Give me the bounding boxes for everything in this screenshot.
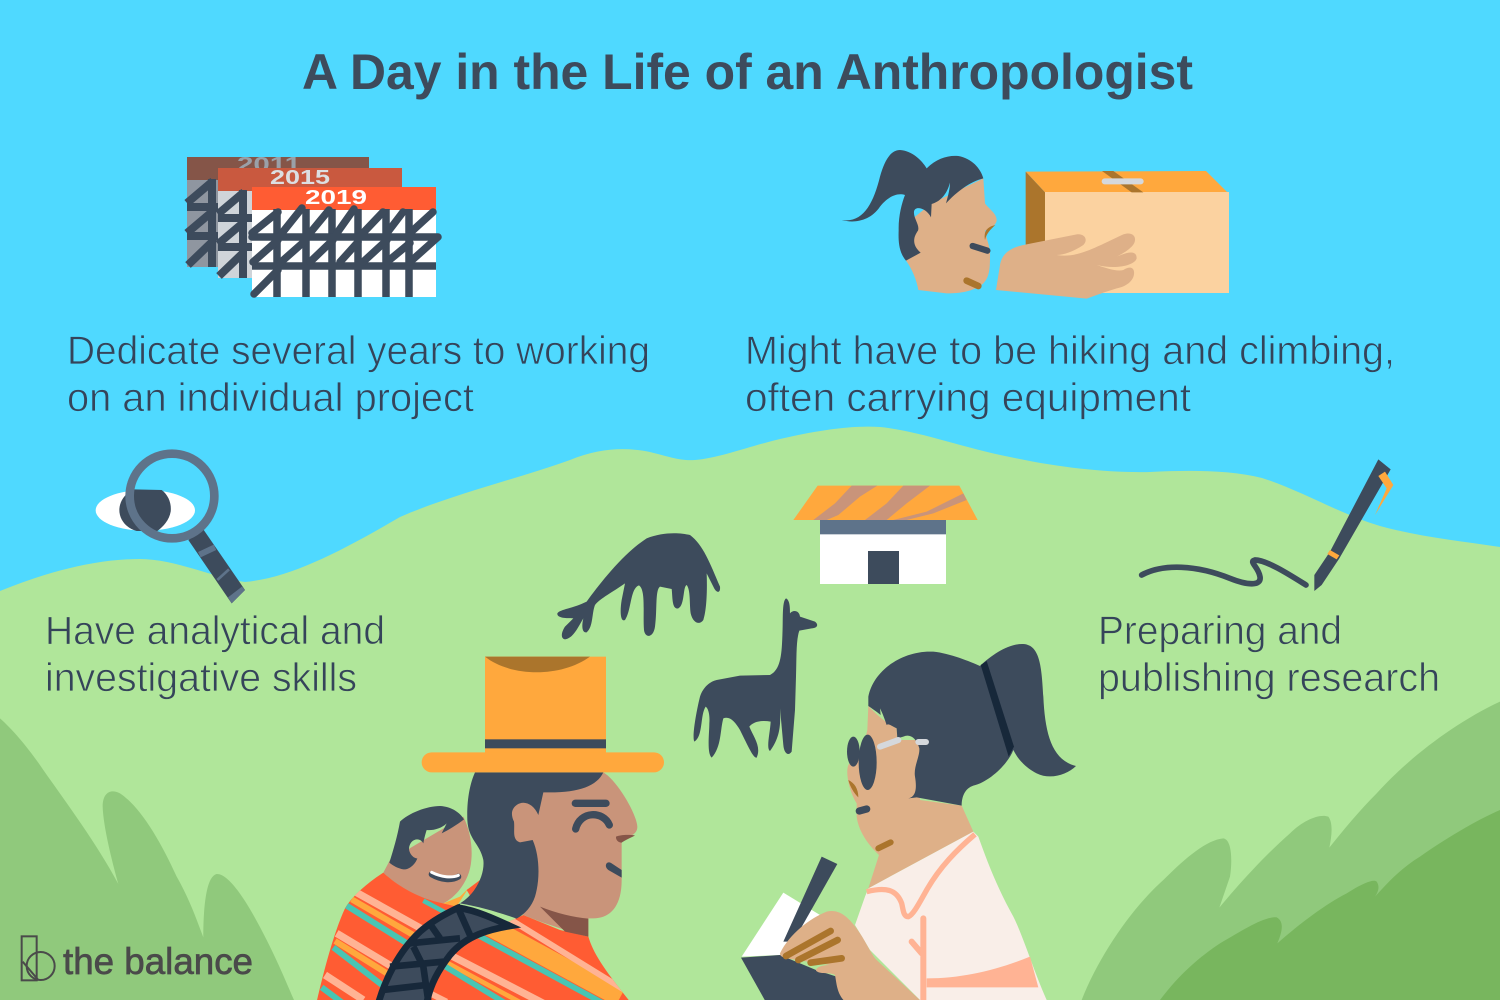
man mouth	[606, 862, 622, 878]
neck shadow	[540, 907, 588, 937]
nose shadow	[848, 780, 858, 797]
house wall	[820, 520, 946, 584]
roof thatch	[813, 486, 967, 520]
pupil	[119, 489, 171, 531]
pen clip	[1375, 472, 1393, 515]
front calendar 2019	[252, 187, 438, 297]
pen body	[1314, 459, 1391, 591]
writing pen	[783, 857, 837, 942]
middle calendar 2015	[218, 167, 402, 278]
baby shoulder accents	[443, 888, 468, 907]
hat dent	[485, 657, 590, 672]
hair and ponytail	[842, 150, 983, 261]
front calendar 2019: 2019	[305, 187, 367, 209]
box side	[1026, 172, 1045, 247]
grazing animal	[557, 533, 720, 639]
middle calendar 2015: 2015	[270, 167, 330, 189]
text: hiking and climbing: Might have to be hiking and climbing,	[745, 329, 1395, 373]
near lens	[859, 735, 877, 790]
text: dedicate several years: Dedicate several years to working	[67, 329, 650, 373]
dark green leaves	[1160, 810, 1500, 1000]
handle	[188, 529, 245, 603]
icon: stacked calendars	[187, 154, 438, 297]
eyebrow	[575, 792, 606, 814]
green hills	[0, 427, 1500, 1000]
face	[906, 178, 997, 293]
mouth	[859, 809, 867, 811]
braid	[378, 908, 510, 1000]
thin handle stripe	[217, 569, 229, 580]
logo: the balance	[22, 936, 253, 982]
nose shadow	[985, 225, 995, 240]
left foliage	[0, 718, 294, 1000]
notebook paper	[742, 893, 820, 957]
box top	[1026, 171, 1229, 192]
eye white	[96, 490, 195, 531]
woman face and neck	[847, 706, 973, 888]
title: A Day in the Life of an Anthropologist	[302, 44, 1193, 100]
icon: woman's head and hand holding box	[842, 150, 1229, 299]
hand	[780, 911, 922, 1000]
logo wordmark: the balance	[63, 941, 253, 982]
hair tie	[981, 661, 1014, 757]
handle stripes	[199, 547, 215, 555]
door	[868, 551, 899, 584]
baby hair	[389, 806, 464, 869]
animals and house	[557, 486, 978, 758]
baby head	[383, 817, 472, 903]
lens ring	[130, 454, 214, 538]
llama	[694, 598, 817, 758]
closed eye	[576, 815, 609, 829]
text: publishing research: publishing research	[1098, 656, 1440, 700]
text: analytical: Have analytical and	[45, 609, 385, 653]
wall band	[820, 520, 946, 534]
baby poncho	[317, 872, 454, 1000]
text: investigative skills: investigative skills	[45, 656, 357, 700]
mid green leaves	[1082, 702, 1500, 1000]
shirt	[855, 832, 1047, 1000]
figure: woman with notebook	[741, 644, 1076, 1000]
placket	[912, 918, 923, 1000]
neck shadow	[878, 842, 891, 848]
hat band	[485, 739, 606, 748]
notebook	[741, 955, 845, 1000]
man nose shadow	[616, 835, 635, 843]
braid crossings	[383, 905, 470, 1000]
handle cap	[228, 587, 245, 603]
hair and ponytail	[868, 644, 1076, 806]
right foliage	[1082, 702, 1500, 1000]
figure: man with baby	[310, 657, 664, 1000]
text: carrying equipment: often carrying equipment	[745, 376, 1191, 420]
box tape	[1102, 178, 1144, 184]
hand	[996, 234, 1137, 299]
icon: pen and squiggle	[1142, 459, 1393, 591]
icon: eye and magnifying glass	[96, 454, 245, 603]
box front	[1045, 192, 1229, 293]
text: preparing: Preparing and	[1098, 609, 1342, 653]
pen band	[1327, 550, 1339, 559]
text: individual project: on an individual project	[67, 376, 474, 420]
logo mark	[22, 936, 55, 980]
sleeve band	[927, 957, 1038, 987]
glasses arm	[880, 740, 926, 747]
mouth	[973, 246, 987, 251]
chin shadow	[967, 281, 978, 286]
baby smile	[432, 874, 458, 879]
back calendar 2011	[187, 154, 369, 267]
hat brim	[422, 752, 664, 772]
far lens	[847, 737, 860, 767]
man poncho	[431, 915, 629, 1000]
squiggle	[1142, 560, 1306, 585]
back calendar 2011: 2011	[237, 154, 301, 176]
hat crown	[485, 657, 606, 767]
collar	[867, 834, 975, 917]
fingers	[786, 931, 842, 963]
baby teeth	[432, 872, 458, 877]
man hair	[460, 772, 603, 919]
man neck and face	[510, 772, 637, 937]
house roof	[793, 486, 978, 520]
red sliver behind hair	[467, 880, 480, 898]
box strap	[1102, 171, 1143, 192]
